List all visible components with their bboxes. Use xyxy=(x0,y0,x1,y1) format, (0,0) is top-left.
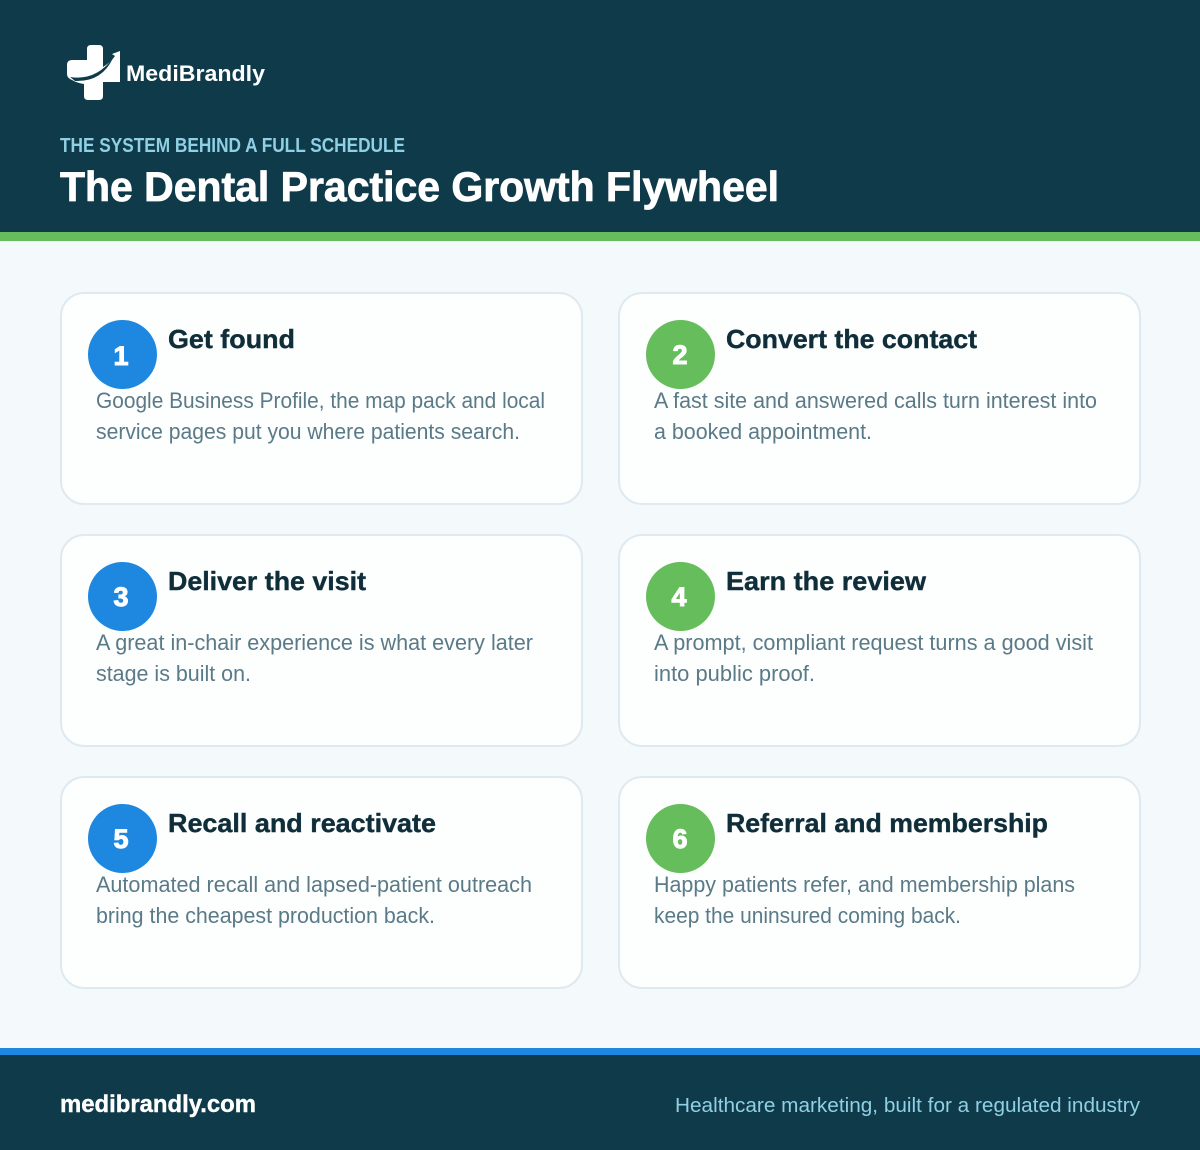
panel: step 6 referral and membership xyxy=(619,777,1140,988)
footer band xyxy=(0,1048,1200,1150)
step description: into public proof. xyxy=(654,661,815,686)
step description: Google Business Profile, the map pack and local xyxy=(96,388,545,413)
icon: medical cross with swoosh xyxy=(67,45,120,100)
step number 1: 1 xyxy=(113,341,129,371)
step description: a booked appointment. xyxy=(654,419,872,444)
step number 6 xyxy=(646,804,715,873)
step description xyxy=(654,388,1097,444)
step number 6: 6 xyxy=(672,824,688,854)
panel: step 3 deliver the visit xyxy=(61,535,582,746)
eyebrow: THE SYSTEM BEHIND A FULL SCHEDULE xyxy=(60,135,405,157)
step description: Happy patients refer, and membership plans xyxy=(654,872,1075,897)
panel: step 2 convert the contact xyxy=(619,293,1140,504)
step number 3 xyxy=(88,562,157,631)
header band xyxy=(0,0,1200,241)
step number 5 xyxy=(88,804,157,873)
footer website: medibrandly.com xyxy=(60,1091,256,1118)
step number 2 xyxy=(646,320,715,389)
step description xyxy=(654,630,1093,686)
step heading: Recall and reactivate xyxy=(168,808,436,838)
footer tagline: Healthcare marketing, built for a regulated industry xyxy=(675,1095,1140,1117)
step number 2: 2 xyxy=(672,340,688,370)
step description xyxy=(96,630,533,686)
step description: keep the uninsured coming back. xyxy=(654,903,961,928)
step number 4 xyxy=(646,562,715,631)
step number 1 xyxy=(88,320,157,389)
step description: A great in-chair experience is what every later xyxy=(96,630,533,655)
step heading: Earn the review xyxy=(726,566,927,596)
step description: A fast site and answered calls turn interest into xyxy=(654,388,1097,413)
step description: A prompt, compliant request turns a good visit xyxy=(654,630,1093,655)
panel: step 5 recall and reactivate xyxy=(61,777,582,988)
step description xyxy=(96,872,532,928)
step number 3: 3 xyxy=(113,582,129,612)
panel: step 4 earn the review xyxy=(619,535,1140,746)
step heading: Convert the contact xyxy=(726,324,977,354)
step number 5: 5 xyxy=(113,824,129,854)
panel: step 1 get found xyxy=(61,293,582,504)
title: The Dental Practice Growth Flywheel xyxy=(60,163,779,210)
step description: service pages put you where patients search. xyxy=(96,419,520,444)
step description: Automated recall and lapsed-patient outreach xyxy=(96,872,532,897)
step heading: Get found xyxy=(168,324,295,354)
step description: bring the cheapest production back. xyxy=(96,903,435,928)
step heading: Referral and membership xyxy=(726,808,1048,838)
step number 4: 4 xyxy=(671,582,687,612)
step description: stage is built on. xyxy=(96,661,251,686)
step description xyxy=(654,872,1075,928)
logo wordmark: MediBrandly xyxy=(126,61,266,86)
step description xyxy=(96,388,545,444)
step heading: Deliver the visit xyxy=(168,566,366,596)
logo xyxy=(67,45,266,100)
